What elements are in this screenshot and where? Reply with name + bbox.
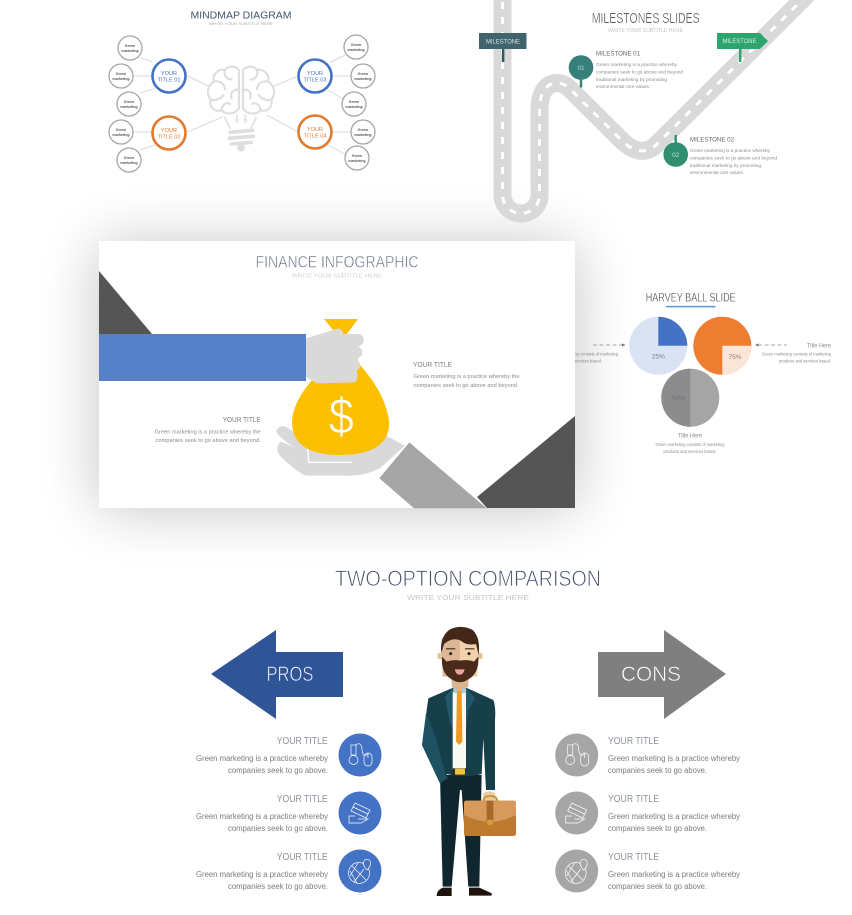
node: your title 02: YOUR (161, 128, 177, 134)
harvey ball 50% (661, 369, 719, 427)
pros row 2: Green marketing is a practice whereby (196, 812, 328, 821)
jacket (422, 688, 495, 790)
text: left label clipped by panel (549, 352, 618, 364)
leaf node labels: marketing (347, 48, 365, 52)
text: upper right: Green marketing is a practice whereby the (414, 374, 520, 380)
title underline (666, 306, 716, 307)
text: milestone 02: MILESTONE 02 (690, 136, 734, 144)
panel: mindmap diagram (109, 10, 375, 172)
node: your title 04: YOUR (307, 127, 323, 133)
leaf node labels: Green (124, 156, 134, 160)
icon: globe and pin (555, 850, 598, 892)
text: left label clipped by panel: Green marketing consists of marketing (549, 352, 618, 356)
panel: finance infographic (99, 241, 575, 508)
node: your title 04 (298, 116, 332, 148)
icon: card in hand (338, 792, 382, 834)
arrow: cons: CONS (621, 663, 681, 686)
upper fist (306, 328, 364, 383)
pin: milestone 01: 01 (577, 65, 585, 72)
pros row 3: Green marketing is a practice whereby (196, 870, 328, 879)
text: upper right: companies seek to go above and beyond. (414, 383, 519, 389)
trousers (440, 775, 482, 887)
node: your title 02 (152, 116, 186, 150)
beard (442, 657, 478, 682)
pros row 3 (196, 850, 382, 892)
leaf node labels: Green (125, 44, 135, 48)
cons row 2: companies seek to go above. (608, 824, 707, 833)
pros row 2: companies seek to go above. (228, 824, 328, 833)
finance subtitle: WRITE YOUR SUBTITLE HERE (292, 274, 382, 280)
pros row 1: companies seek to go above. (228, 766, 328, 775)
pin: milestone 01 (569, 55, 593, 88)
harvey ball 75% (693, 317, 751, 375)
cons row 3: YOUR TITLE (608, 851, 659, 863)
leaf node labels: Green (351, 43, 361, 47)
panel: two-option comparison (196, 566, 740, 896)
sign: right milestone: MILESTONE (722, 38, 756, 45)
corner triangle: bottom right (477, 416, 575, 508)
harvey ball 50%: 50% (672, 395, 685, 402)
text: lower left (155, 415, 261, 444)
leaf node labels (112, 43, 372, 165)
text: milestone 02: Green marketing is a practice whereby (690, 148, 771, 154)
text: lower left: YOUR TITLE (223, 415, 261, 424)
node: your title 01: TITLE 01 (157, 78, 181, 84)
right leaf nodes (342, 35, 375, 170)
text: upper right: YOUR TITLE (413, 360, 452, 369)
panel: harvey ball slide (549, 292, 832, 454)
leaf node labels: marketing (120, 105, 138, 109)
text: milestone 02: companies seek to go above and beyond (690, 156, 777, 162)
leaf node labels: Green (358, 72, 368, 76)
leaf node labels: Green (116, 128, 126, 132)
finance title: FINANCE INFOGRAPHIC (256, 254, 419, 272)
upper sleeve (99, 334, 306, 381)
text: bottom label: Green marketing consists of marketing (656, 442, 725, 447)
text: upper right (413, 360, 520, 389)
icon: card in hand (555, 792, 598, 834)
illustration: hands and money bag (276, 319, 487, 508)
node: your title 01: YOUR (161, 71, 177, 77)
tie (456, 691, 462, 745)
mouth (455, 669, 465, 675)
text: lower left: Green marketing is a practice whereby the (155, 430, 261, 436)
panel: milestones slide (479, 0, 815, 214)
left leaf nodes (109, 36, 142, 172)
cons row 1: companies seek to go above. (608, 766, 707, 775)
money bag (292, 319, 389, 455)
neck and ears (452, 673, 468, 692)
text: milestone 02 (690, 136, 777, 176)
cons row 1: Green marketing is a practice whereby (608, 754, 740, 763)
money bag: $ (329, 388, 354, 445)
leaf node labels: marketing (348, 159, 366, 163)
pros row 2 (196, 792, 382, 834)
text: milestone 01: traditional marketing by promoting (596, 77, 667, 83)
node: your title 03: YOUR (307, 71, 323, 77)
text: right label: Title Here (807, 344, 832, 350)
cons row 3: Green marketing is a practice whereby (608, 870, 740, 879)
text: right label: products and services based. (779, 358, 831, 364)
leaf node labels: marketing (120, 161, 138, 165)
text: right label: Green marketing consists of marketing (762, 352, 831, 356)
milestones subtitle: WRITE YOUR SUBTITLE HERE (608, 28, 684, 34)
pros row 1: YOUR TITLE (277, 735, 328, 747)
shoes (437, 888, 492, 896)
leaf node labels: marketing (354, 133, 372, 137)
comparison subtitle: WRITE YOUR SUBTITLE HERE (407, 593, 529, 602)
cons row 2 (555, 792, 740, 834)
cons row 2: Green marketing is a practice whereby (608, 812, 740, 821)
eyes (446, 648, 474, 655)
milestones title: MILESTONES SLIDES (592, 11, 700, 27)
leaf node labels: Green (358, 128, 368, 132)
arrow: left dashed (593, 343, 626, 347)
text: lower left: companies seek to go above and beyond. (156, 438, 261, 444)
text: bottom label: Title Here (678, 434, 703, 440)
text: right label (762, 344, 832, 364)
arrow: cons (598, 630, 726, 719)
pros row 3: YOUR TITLE (277, 851, 328, 863)
arrow: right dashed (755, 343, 787, 347)
harvey ball 25% (629, 317, 687, 375)
pros row 1: Green marketing is a practice whereby (196, 754, 328, 763)
arrow: pros (211, 630, 343, 719)
cons row 3: companies seek to go above. (608, 882, 707, 891)
leaf node labels: Green (349, 100, 359, 104)
harvey ball 25%: 25% (652, 354, 665, 360)
belt (453, 768, 466, 775)
text: milestone 01: Green marketing is a practice whereby (596, 62, 678, 68)
comparison title: TWO-OPTION COMPARISON (335, 566, 601, 591)
harvey ball 75%: 75% (728, 354, 742, 361)
cons row 1: YOUR TITLE (608, 735, 659, 747)
pin: milestone 02: 02 (672, 152, 680, 159)
pin: milestone 02 (663, 135, 688, 167)
lower sleeve (379, 442, 487, 508)
hand (483, 791, 496, 801)
corner triangle: top left (99, 271, 152, 334)
node: your title 01 (152, 60, 186, 92)
icon: usb and mouse (555, 734, 598, 776)
text: bottom label: products and services based. (664, 449, 716, 454)
icon: usb and mouse (338, 734, 382, 776)
text: milestone 01: companies seek to go above and beyond (596, 70, 683, 76)
node: your title 02: TITLE 02 (157, 134, 181, 140)
sign: left milestone: MILESTONE (486, 38, 520, 46)
mindmap subtitle: WRITE YOUR SUBTITLE HERE (209, 22, 274, 26)
node: your title 03 (298, 60, 332, 92)
finance panel shadow (99, 245, 575, 508)
lower hand (276, 426, 405, 476)
pros row 3: companies seek to go above. (228, 882, 328, 891)
face (442, 638, 478, 677)
text: milestone 01: environmental core values. (596, 84, 650, 90)
leaf node labels: marketing (345, 105, 363, 109)
cons row 3 (555, 850, 740, 892)
text: bottom label (656, 434, 725, 454)
node: your title 03: TITLE 03 (303, 78, 327, 84)
leaf node labels: marketing (112, 133, 130, 137)
leaf node labels: Green (116, 72, 126, 76)
shirt (453, 692, 466, 770)
text: milestone 01 (596, 50, 683, 90)
road (502, 0, 815, 214)
hair (441, 627, 479, 655)
arrow: pros: PROS (266, 663, 314, 686)
leaf node labels: marketing (112, 77, 130, 81)
cons row 2: YOUR TITLE (608, 793, 659, 805)
icon: globe and pin (338, 850, 382, 892)
leaf node labels: Green (352, 154, 362, 158)
mindmap title: MINDMAP DIAGRAM (190, 10, 292, 22)
text: milestone 01: MILESTONE 01 (596, 50, 640, 58)
leaf node labels: Green (124, 100, 134, 104)
pros row 1 (196, 734, 382, 776)
harvey title: HARVEY BALL SLIDE (646, 292, 736, 304)
cons row 1 (555, 734, 740, 776)
text: milestone 02: traditional marketing by promoting (690, 163, 761, 169)
icon: brain light bulb (208, 67, 274, 152)
briefcase (464, 796, 516, 836)
node: your title 04: TITLE 04 (303, 134, 327, 140)
collar (453, 685, 466, 694)
pros row 2: YOUR TITLE (277, 793, 328, 805)
text: left label clipped by panel: products and services based. (550, 358, 602, 364)
text: milestone 02: environmental core values. (690, 170, 744, 176)
leaf node labels: marketing (354, 77, 372, 81)
sign: left milestone (479, 33, 526, 62)
leaf node labels: marketing (121, 49, 139, 53)
sign: right milestone (717, 33, 768, 62)
illustration: businessman (422, 627, 516, 896)
